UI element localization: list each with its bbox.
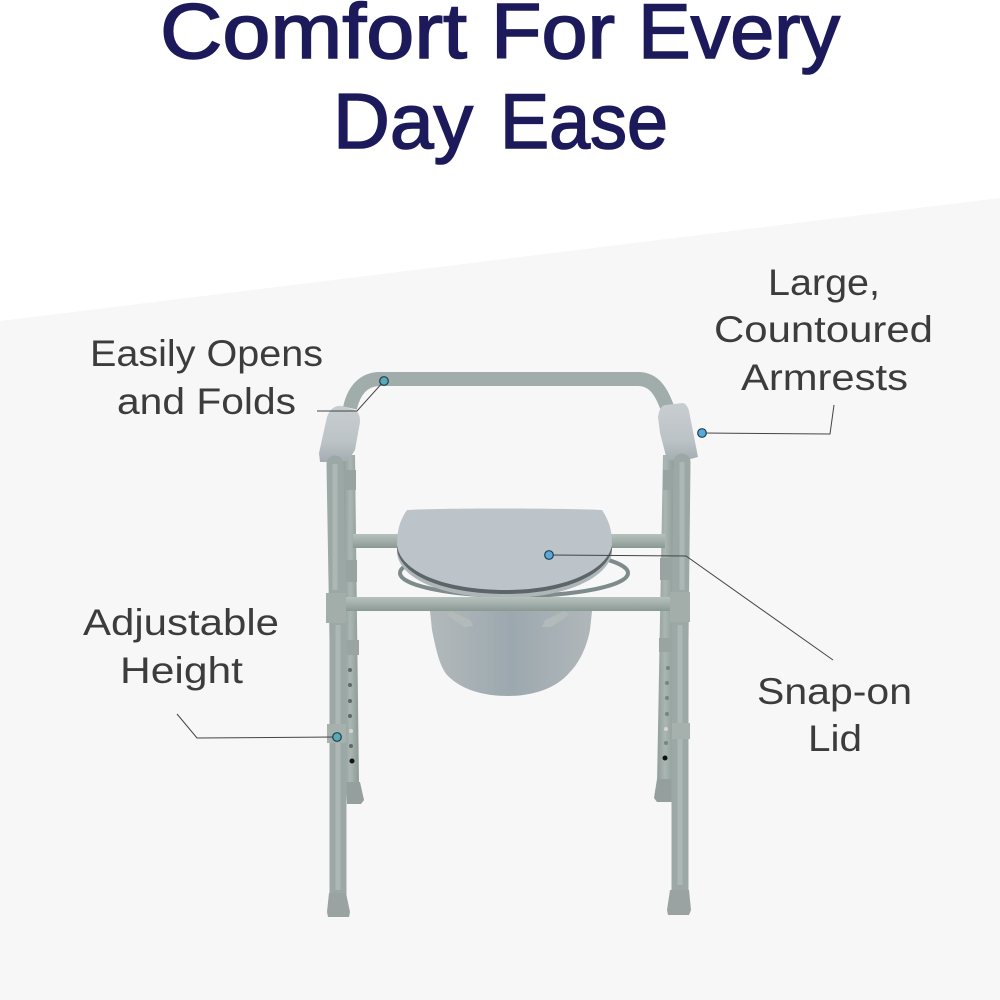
label: Adjustable Height bbox=[83, 602, 279, 691]
bucket bbox=[430, 611, 592, 696]
label: Snap-on Lid: Lid bbox=[808, 718, 862, 759]
rear legs bbox=[343, 455, 676, 804]
top back rail bbox=[350, 379, 667, 408]
rubber feet bbox=[327, 890, 691, 917]
label: Easily Opens and Folds: Easily Opens bbox=[90, 333, 323, 374]
seat ring bbox=[397, 541, 628, 598]
callout: adjustable height bbox=[177, 714, 341, 741]
upper cross rail bbox=[353, 534, 665, 548]
label: Large, Countoured Armrests: Armrests bbox=[741, 357, 908, 398]
right armrest bbox=[658, 403, 698, 461]
label: Large, Countoured Armrests: Large, bbox=[768, 262, 880, 303]
label: Adjustable Height: Adjustable bbox=[83, 602, 279, 643]
bucket brackets bbox=[447, 611, 569, 627]
callout: snap-on lid bbox=[545, 551, 833, 660]
label: Large, Countoured Armrests: Countoured bbox=[714, 309, 933, 350]
label: Easily Opens and Folds: and Folds bbox=[117, 381, 296, 422]
left armrest bbox=[319, 406, 360, 462]
leg collars bbox=[326, 592, 690, 743]
title bbox=[160, 0, 840, 165]
lower cross rail bbox=[345, 597, 672, 611]
label: Adjustable Height: Height bbox=[120, 650, 244, 691]
callout: Easily Opens and Folds bbox=[317, 377, 388, 411]
label: Snap-on Lid: Snap-on bbox=[757, 671, 912, 712]
commode chair illustration bbox=[319, 379, 698, 917]
label: Large, Countoured Armrests bbox=[714, 262, 933, 398]
callout: armrests bbox=[698, 405, 834, 437]
height adjustment holes bbox=[348, 666, 670, 764]
front legs bbox=[335, 462, 682, 905]
label: Snap-on Lid bbox=[757, 671, 912, 759]
title: Ease bbox=[500, 77, 668, 165]
title: Day bbox=[333, 77, 473, 165]
label: Easily Opens and Folds bbox=[90, 333, 323, 422]
snap-on lid bbox=[397, 508, 612, 590]
